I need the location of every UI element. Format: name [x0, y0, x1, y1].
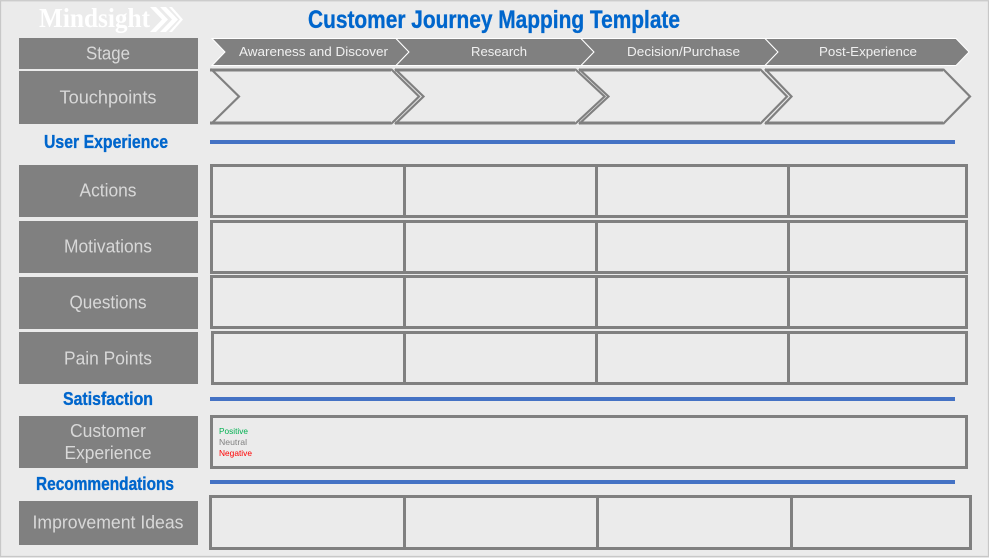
divider: User Experience: [210, 140, 955, 144]
touchpoint chevrons: [210, 69, 970, 124]
row label: Touchpoints: Touchpoints: [60, 88, 156, 108]
legend: sentiment scale: [219, 426, 252, 458]
row: Actions: Actions: [80, 180, 136, 200]
row: Customer Experience: [19, 416, 966, 468]
stage: Awareness and Discover: Awareness and Discover: [239, 44, 389, 59]
stage: Post-Experience: Post-Experience: [819, 44, 917, 59]
divider: Satisfaction: [210, 397, 955, 401]
heading: Recommendations: Recommendations: [36, 474, 174, 494]
logo: Mindsight: Mindsight: [39, 3, 150, 33]
row: Motivations: Motivations: [64, 236, 152, 256]
legend: sentiment scale: Negative: [219, 448, 252, 458]
row label: Stage: Stage: [86, 44, 130, 64]
stage chevrons: [212, 38, 969, 66]
row: Actions: [19, 165, 966, 217]
row: Improvement Ideas: [19, 496, 970, 549]
heading: User Experience: User Experience: [44, 132, 168, 152]
row: Customer Experience: Customer: [70, 421, 146, 441]
row: Questions: [19, 276, 966, 329]
stage: Research: Research: [471, 44, 527, 59]
divider: Recommendations: [210, 480, 955, 484]
row: Improvement Ideas: Improvement Ideas: [32, 512, 184, 532]
stage: Decision/Purchase: Decision/Purchase: [627, 44, 740, 59]
row label: Touchpoints: [19, 71, 198, 124]
row: Pain Points: Pain Points: [64, 348, 152, 368]
legend: sentiment scale: Neutral: [219, 437, 247, 447]
row: Motivations: [19, 221, 966, 273]
row: Questions: Questions: [70, 292, 146, 312]
stage: Awareness and Discover: [212, 38, 409, 66]
row: Customer Experience: Experience: [64, 443, 152, 463]
row label: Stage: [19, 38, 198, 69]
legend: sentiment scale: Positive: [219, 426, 248, 436]
heading: Satisfaction: Satisfaction: [63, 389, 153, 409]
stage: Decision/Purchase: [581, 38, 778, 66]
stage: Post-Experience: [765, 38, 969, 66]
title: Customer Journey Mapping Template: [308, 6, 680, 34]
row: Pain Points: [19, 332, 966, 384]
stage: Research: [396, 38, 594, 66]
